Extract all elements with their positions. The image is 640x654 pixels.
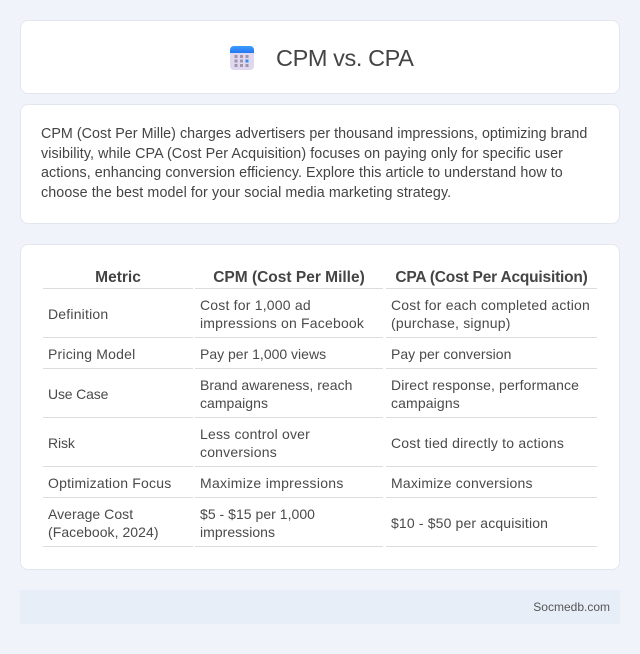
comparison table: impressions xyxy=(200,524,275,540)
comparison table: campaigns xyxy=(200,395,268,411)
header card xyxy=(20,20,620,94)
comparison table: Maximize conversions xyxy=(391,475,533,491)
row: optimization focus: Optimization Focus xyxy=(48,475,171,491)
comparison table: campaigns xyxy=(391,395,460,411)
comparison table: Cost tied directly to actions xyxy=(391,435,564,451)
comparison table: Cost for each completed action xyxy=(391,297,590,313)
intro text: CPM (Cost Per Mille) charges advertisers per thousand impressions, optimizing brand xyxy=(41,126,587,142)
comparison table: $10 - $50 per acquisition xyxy=(391,515,548,531)
intro text: actions, enhancing conversion efficiency. Explore this article to understand how to xyxy=(41,165,563,181)
row: pricing model: Pricing Model xyxy=(48,346,135,362)
comparison table: conversions xyxy=(200,444,277,460)
comparison table: Brand awareness, reach xyxy=(200,377,352,393)
intro text xyxy=(41,126,587,201)
row: average cost xyxy=(48,506,159,540)
comparison table: Maximize impressions xyxy=(200,475,344,491)
header: CPA: CPA (Cost Per Acquisition) xyxy=(395,269,588,286)
header: metric: Metric xyxy=(95,269,141,286)
comparison table: Direct response, performance xyxy=(391,377,579,393)
comparison table: (purchase, signup) xyxy=(391,315,511,331)
comparison table: Pay per conversion xyxy=(391,346,511,362)
footer text: Socmedb.com xyxy=(533,600,610,614)
row: average cost: Average Cost xyxy=(48,506,133,522)
row: average cost: (Facebook, 2024) xyxy=(48,524,159,540)
comparison table: Less control over xyxy=(200,426,310,442)
comparison table: impressions on Facebook xyxy=(200,315,364,331)
intro text: visibility, while CPA (Cost Per Acquisition) focuses on paying only for specific user xyxy=(41,146,563,162)
title: CPM vs. CPA xyxy=(276,45,413,71)
row: risk: Risk xyxy=(48,435,75,451)
intro text: choose the best model for your social media marketing strategy. xyxy=(41,185,451,201)
icon: calendar xyxy=(230,46,254,70)
comparison table: Pay per 1,000 views xyxy=(200,346,326,362)
panel: intro xyxy=(20,104,620,224)
panel: comparison table xyxy=(20,244,620,570)
comparison table: $5 - $15 per 1,000 xyxy=(200,506,315,522)
row: definition: Definition xyxy=(48,306,108,322)
footer bar xyxy=(20,590,620,624)
header: CPM: CPM (Cost Per Mille) xyxy=(213,269,365,286)
comparison table: Cost for 1,000 ad xyxy=(200,297,311,313)
row: use case: Use Case xyxy=(48,386,108,402)
